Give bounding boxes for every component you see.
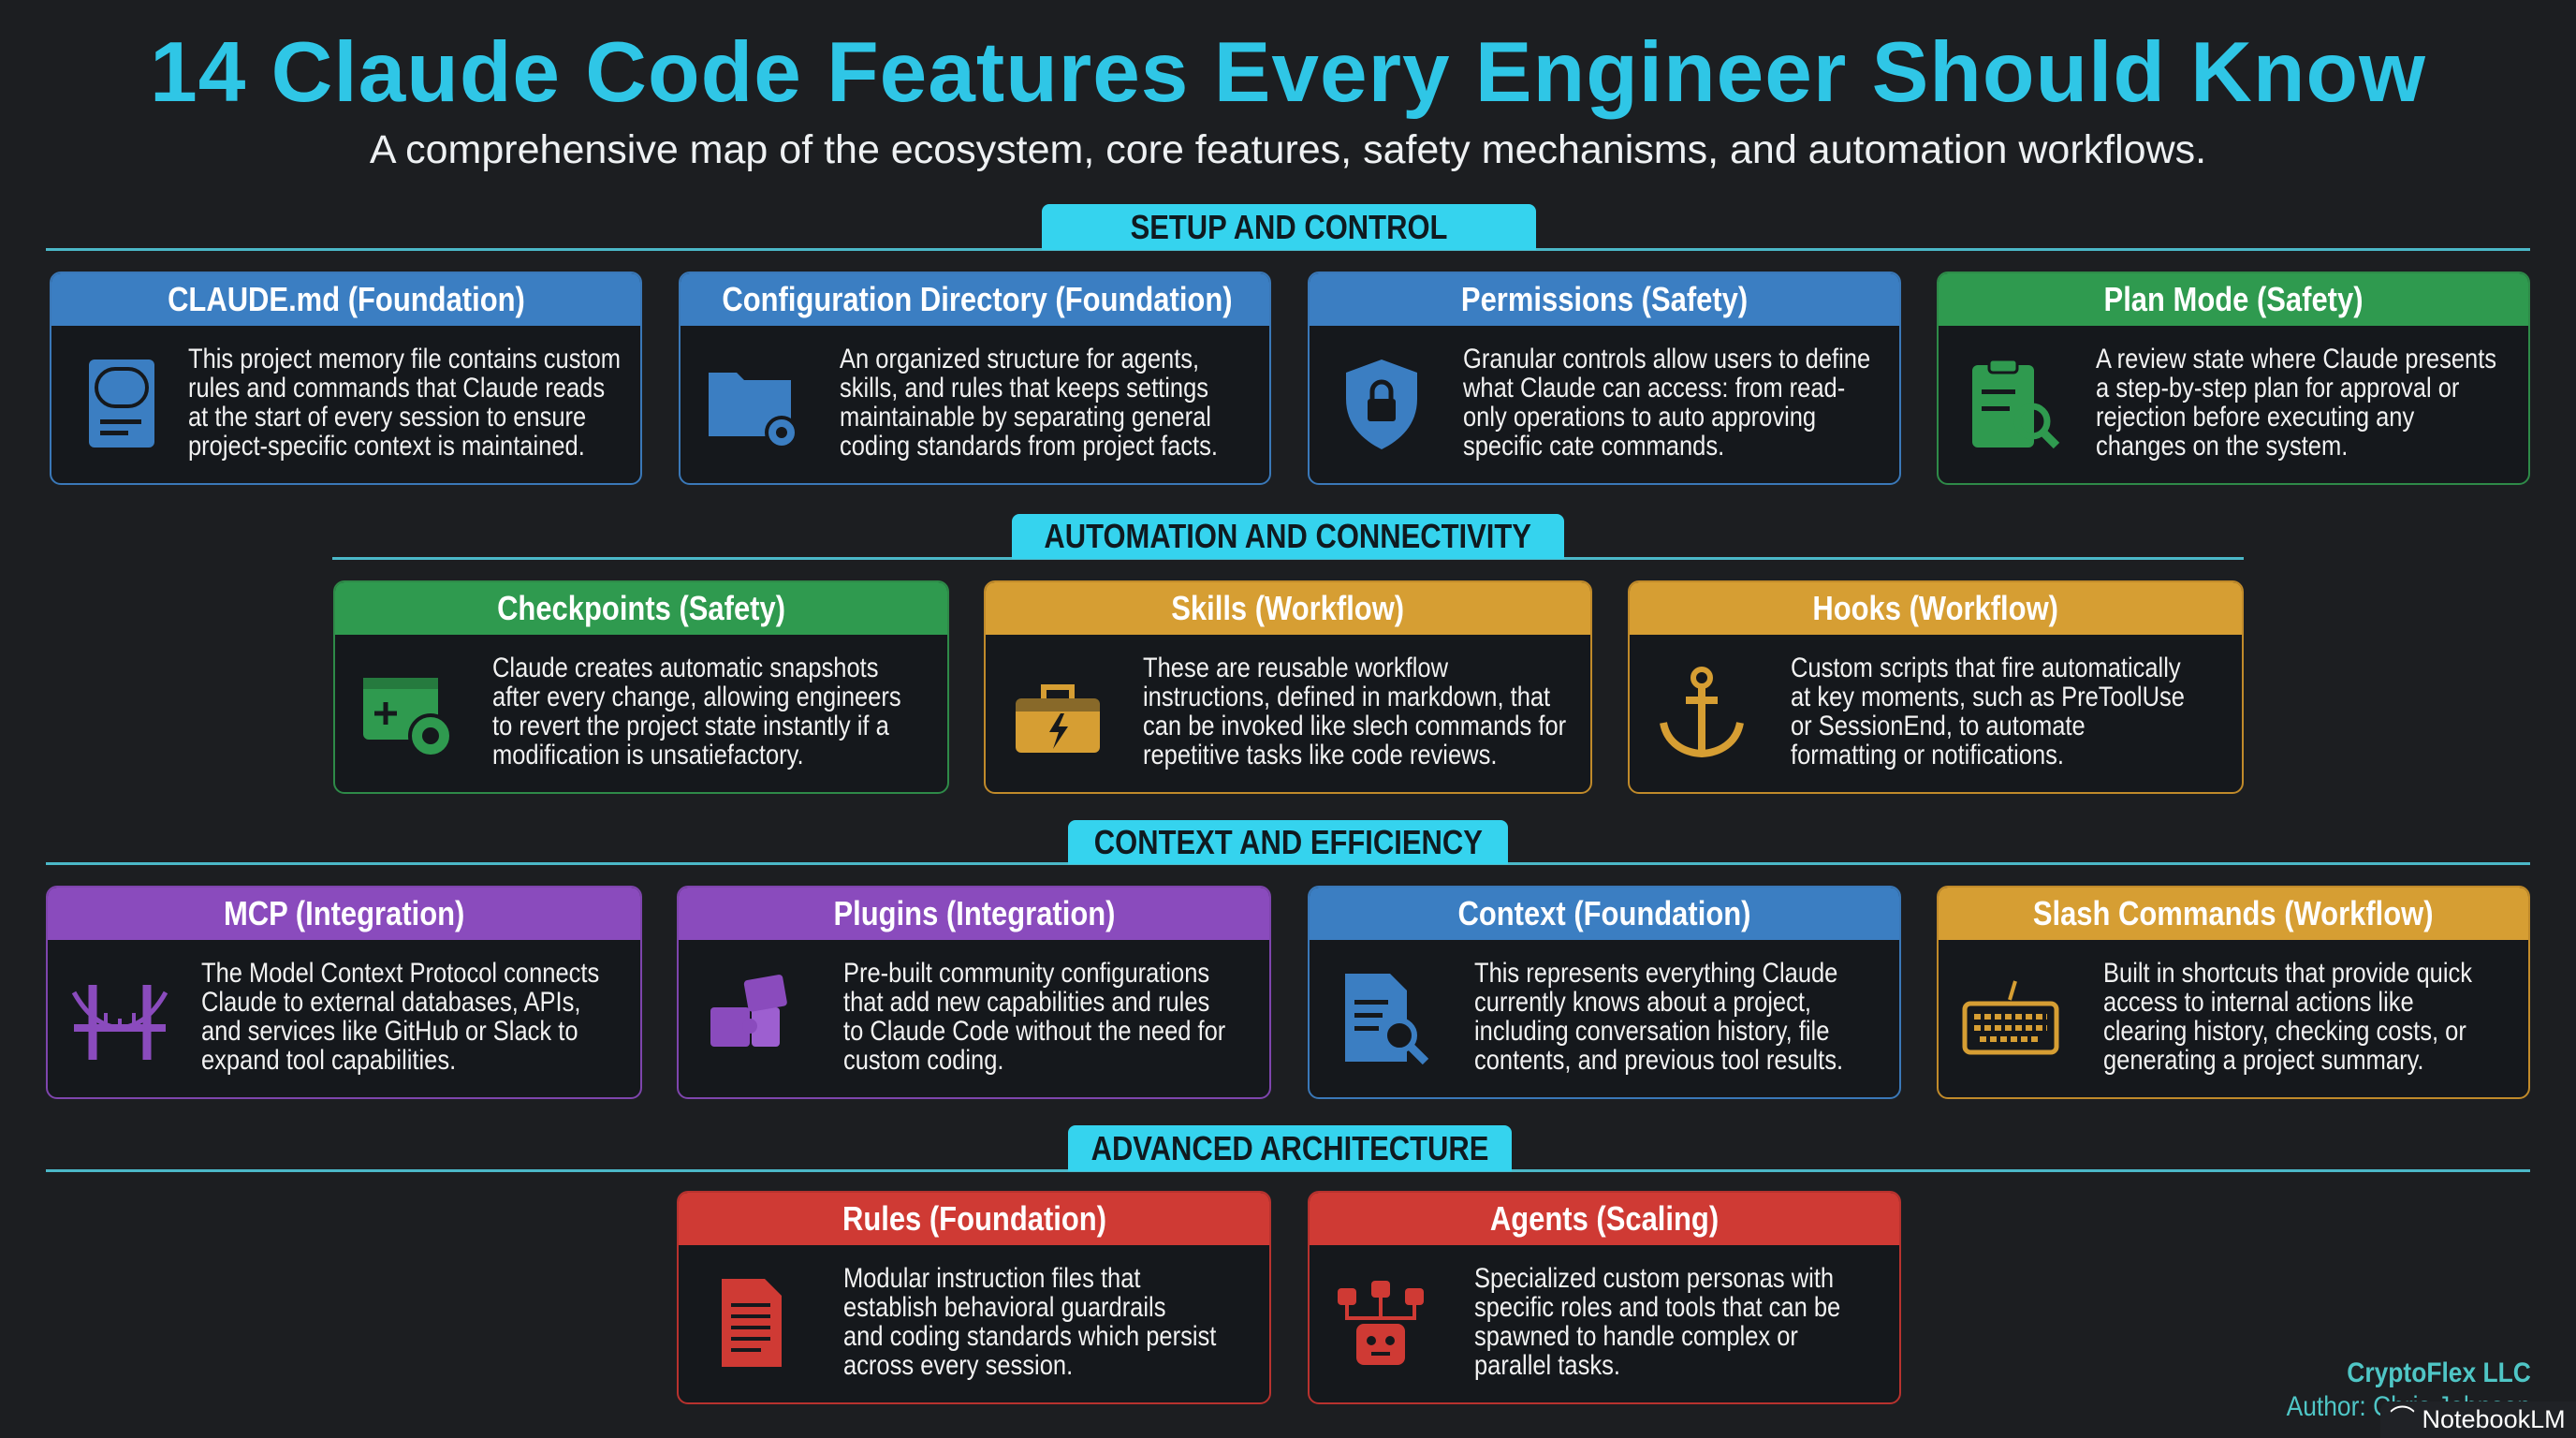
card: Permissions <box>1308 271 1901 485</box>
icon: document search <box>1345 974 1428 1065</box>
card: Permissions: specific cate commands. <box>1463 431 1724 462</box>
section tab: setup and control <box>1042 204 1536 250</box>
card: Configuration Directory: An organized structure for agents, <box>840 344 1199 374</box>
card: Agents: Specialized custom personas with <box>1474 1263 1834 1294</box>
card: Plugins: Plugins (Integration) <box>833 894 1115 932</box>
card: CLAUDE.md: This project memory file contains custom <box>188 344 621 374</box>
card: Configuration Directory: skills, and rules that keeps settings <box>840 373 1208 404</box>
card: Configuration Directory: coding standards from project facts. <box>840 431 1218 462</box>
card: Skills: can be invoked like slech commands for <box>1143 711 1566 741</box>
section tab: advanced architecture: ADVANCED ARCHITECTURE <box>1091 1129 1488 1167</box>
card: Configuration Directory <box>679 271 1271 485</box>
card: Rules: across every session. <box>843 1350 1073 1381</box>
card: Agents: specific roles and tools that can be <box>1474 1292 1840 1323</box>
card: Plugins <box>677 886 1271 1099</box>
card: Checkpoints: to revert the project state instantly if a <box>492 711 889 741</box>
card: MCP <box>46 886 642 1099</box>
card: Slash Commands: clearing history, checking costs, or <box>2103 1016 2466 1047</box>
icon: document <box>722 1279 782 1367</box>
card: Configuration Directory: maintainable by separating general <box>840 402 1211 433</box>
card: Plugins: custom coding. <box>843 1045 1004 1076</box>
card: Slash Commands <box>1937 886 2530 1099</box>
card: CLAUDE.md: CLAUDE.md (Foundation) <box>168 280 524 318</box>
card: CLAUDE.md: project-specific context is maintained. <box>188 431 585 462</box>
card: Agents: Agents (Scaling) <box>1490 1199 1719 1238</box>
card: Rules: Rules (Foundation) <box>842 1199 1106 1238</box>
card: Checkpoints: Claude creates automatic snapshots <box>492 653 878 683</box>
card: Hooks: Custom scripts that fire automatically <box>1791 653 2181 683</box>
card: MCP: MCP (Integration) <box>224 894 464 932</box>
card: Agents: spawned to handle complex or <box>1474 1321 1798 1352</box>
card: MCP: The Model Context Protocol connects <box>201 958 599 989</box>
card: Hooks: Hooks (Workflow) <box>1813 589 2058 627</box>
card: MCP: and services like GitHub or Slack to <box>201 1016 578 1047</box>
icon: clipboard magnifier <box>1972 361 2059 448</box>
card: Hooks: formatting or notifications. <box>1791 740 2064 770</box>
badge: NotebookLM: ⌒ NotebookLM <box>2390 1405 2566 1433</box>
card: Checkpoints: modification is unsatiefactory. <box>492 740 804 770</box>
card: MCP: Claude to external databases, APIs, <box>201 987 580 1018</box>
title: 14 Claude Code Features Every Engineer Should Know <box>150 25 2426 120</box>
icon: document brain <box>89 360 154 448</box>
card: Skills <box>984 580 1592 794</box>
icon: window with restore <box>363 678 449 755</box>
footer credit <box>2286 1357 2531 1422</box>
section tab: setup and control: SETUP AND CONTROL <box>1131 208 1447 245</box>
card: Plan Mode: Plan Mode (Safety) <box>2104 280 2363 318</box>
card: Skills: instructions, defined in markdown, that <box>1143 682 1550 712</box>
card: Agents <box>1308 1191 1901 1404</box>
card: Slash Commands: access to internal actions like <box>2103 987 2414 1018</box>
card: Checkpoints: after every change, allowing engineers <box>492 682 901 712</box>
icon: robots <box>1338 1281 1424 1365</box>
icon: toolbox <box>1016 684 1100 753</box>
card: Skills: Skills (Workflow) <box>1172 589 1404 627</box>
card: Context: contents, and previous tool results. <box>1474 1045 1843 1076</box>
card: CLAUDE.md: at the start of every session to ensure <box>188 402 586 433</box>
card: MCP: expand tool capabilities. <box>201 1045 456 1076</box>
card: Context: including conversation history, file <box>1474 1016 1829 1047</box>
icon: shield lock <box>1346 360 1417 449</box>
card: Configuration Directory: Configuration Directory (Foundation) <box>722 280 1233 318</box>
icon: folder gear <box>709 373 795 446</box>
card: Permissions: what Claude can access: from read- <box>1463 373 1845 404</box>
card: Skills: repetitive tasks like code reviews. <box>1143 740 1497 770</box>
card: CLAUDE.md <box>50 271 642 485</box>
card: Skills: These are reusable workflow <box>1143 653 1448 683</box>
subtitle: A comprehensive map of the ecosystem, core features, safety mechanisms, and automation workflows. <box>370 127 2206 172</box>
card: Slash Commands: generating a project summary. <box>2103 1045 2424 1076</box>
card: Rules: and coding standards which persist <box>843 1321 1216 1352</box>
footer credit: Author: Chris Johnson <box>2287 1391 2531 1422</box>
badge: NotebookLM <box>2380 1401 2576 1438</box>
card: Plan Mode <box>1937 271 2530 485</box>
card: CLAUDE.md: rules and commands that Claude reads <box>188 373 605 404</box>
card: Permissions: Permissions (Safety) <box>1461 280 1748 318</box>
card: Slash Commands: Slash Commands (Workflow) <box>2033 894 2434 932</box>
card: Permissions: Granular controls allow users to define <box>1463 344 1870 374</box>
card: Checkpoints: Checkpoints (Safety) <box>497 589 785 627</box>
card: Rules <box>677 1191 1271 1404</box>
section tab: automation and connectivity: AUTOMATION AND CONNECTIVITY <box>1045 517 1531 555</box>
card: Hooks: or SessionEnd, to automate <box>1791 711 2086 741</box>
card: Slash Commands: Built in shortcuts that provide quick <box>2103 958 2472 989</box>
card: Context: currently knows about a project, <box>1474 987 1811 1018</box>
icon: puzzle <box>710 975 787 1047</box>
icon: keyboard <box>1962 980 2059 1054</box>
card: Checkpoints <box>333 580 949 794</box>
icon: anchor <box>1660 667 1744 757</box>
card: Plan Mode: rejection before executing any <box>2096 402 2414 433</box>
card: Rules: Modular instruction files that <box>843 1263 1140 1294</box>
card: Plugins: that add new capabilities and rules <box>843 987 1209 1018</box>
card: Plan Mode: changes on the system. <box>2096 431 2348 462</box>
card: Plugins: Pre-built community configurations <box>843 958 1209 989</box>
card: Context <box>1308 886 1901 1099</box>
card: Rules: establish behavioral guardrails <box>843 1292 1165 1323</box>
card: Context: Context (Foundation) <box>1458 894 1750 932</box>
card: Context: This represents everything Claude <box>1474 958 1837 989</box>
section tab: context and efficiency: CONTEXT AND EFFICIENCY <box>1093 822 1483 861</box>
card: Hooks <box>1628 580 2244 794</box>
card: Agents: parallel tasks. <box>1474 1350 1620 1381</box>
card: Hooks: at key moments, such as PreToolUse <box>1791 682 2185 712</box>
card: Plan Mode: a step-by-step plan for approval or <box>2096 373 2459 404</box>
card: Plugins: to Claude Code without the need for <box>843 1016 1225 1047</box>
icon: bridge <box>71 985 168 1060</box>
footer credit: CryptoFlex LLC <box>2347 1357 2531 1388</box>
card: Plan Mode: A review state where Claude presents <box>2096 344 2496 374</box>
card: Permissions: only operations to auto approving <box>1463 402 1816 433</box>
